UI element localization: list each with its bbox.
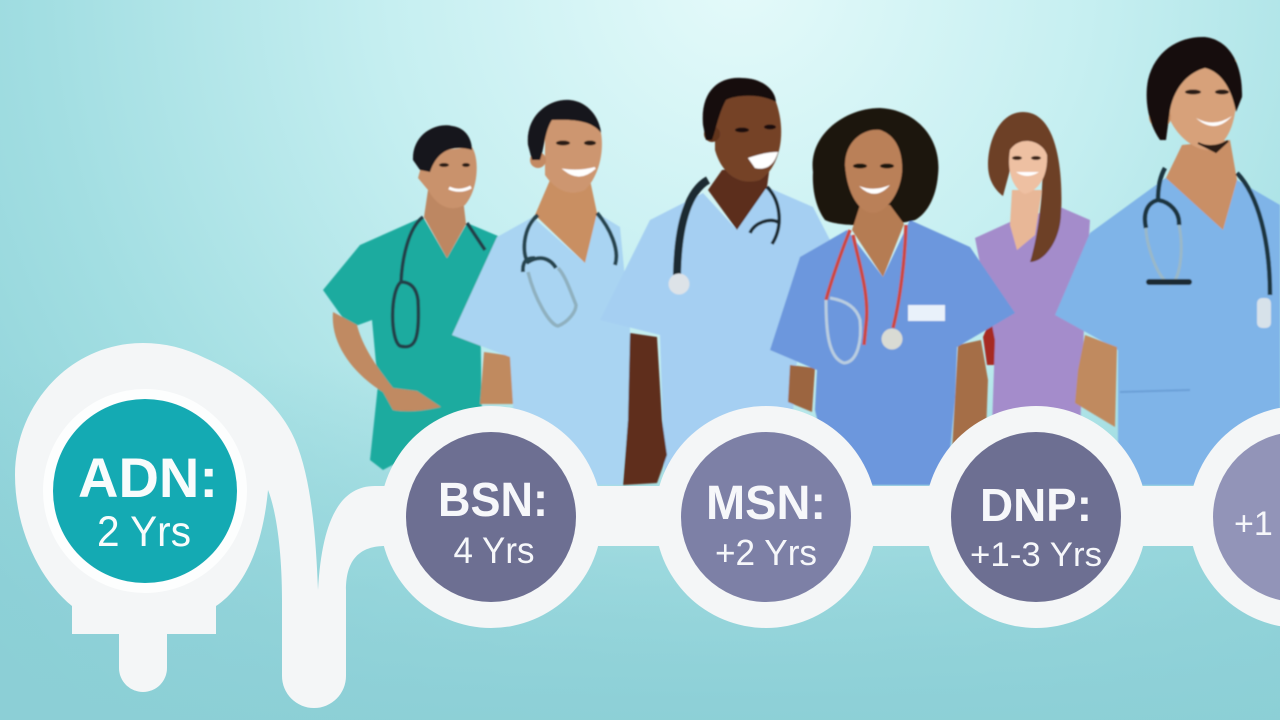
step: ADN 2 Yrs: ADN:	[78, 446, 218, 509]
nurse 2: light blue scrubs	[452, 100, 630, 485]
stethoscope	[826, 225, 906, 345]
name tag	[908, 305, 945, 321]
pathway connector	[15, 343, 1280, 708]
stethoscope	[1145, 168, 1270, 295]
step: BSN 4 Yrs: BSN:	[438, 474, 548, 527]
step: DNP +1-3 Yrs	[925, 406, 1147, 628]
step: cropped next stage: +1	[1234, 505, 1273, 543]
step: ADN 2 Yrs	[43, 389, 247, 593]
stethoscope	[523, 213, 616, 272]
stethoscope	[677, 180, 708, 275]
connector tail	[119, 630, 167, 692]
step: MSN +2 Yrs: +2 Yrs	[715, 532, 817, 573]
nurse 4: female, royal blue scrubs	[770, 108, 1015, 486]
nurse 5: purple scrubs	[975, 112, 1090, 486]
group of nurses	[323, 37, 1280, 486]
stethoscope	[393, 217, 485, 347]
step: ADN 2 Yrs: 2 Yrs	[97, 508, 191, 556]
step: DNP +1-3 Yrs: +1-3 Yrs	[970, 536, 1102, 574]
step: MSN +2 Yrs	[655, 406, 877, 628]
step: MSN +2 Yrs: MSN:	[706, 477, 826, 530]
step: DNP +1-3 Yrs: DNP:	[980, 479, 1092, 531]
nurse 3: blue scrubs, dark skin	[600, 78, 830, 486]
nurse 1: teal scrubs	[323, 125, 498, 470]
step: BSN 4 Yrs	[380, 406, 602, 628]
nurse 6: right foreground, blue scrubs	[1055, 37, 1280, 485]
step: BSN 4 Yrs: 4 Yrs	[454, 530, 534, 571]
step: cropped next stage	[1189, 406, 1280, 628]
